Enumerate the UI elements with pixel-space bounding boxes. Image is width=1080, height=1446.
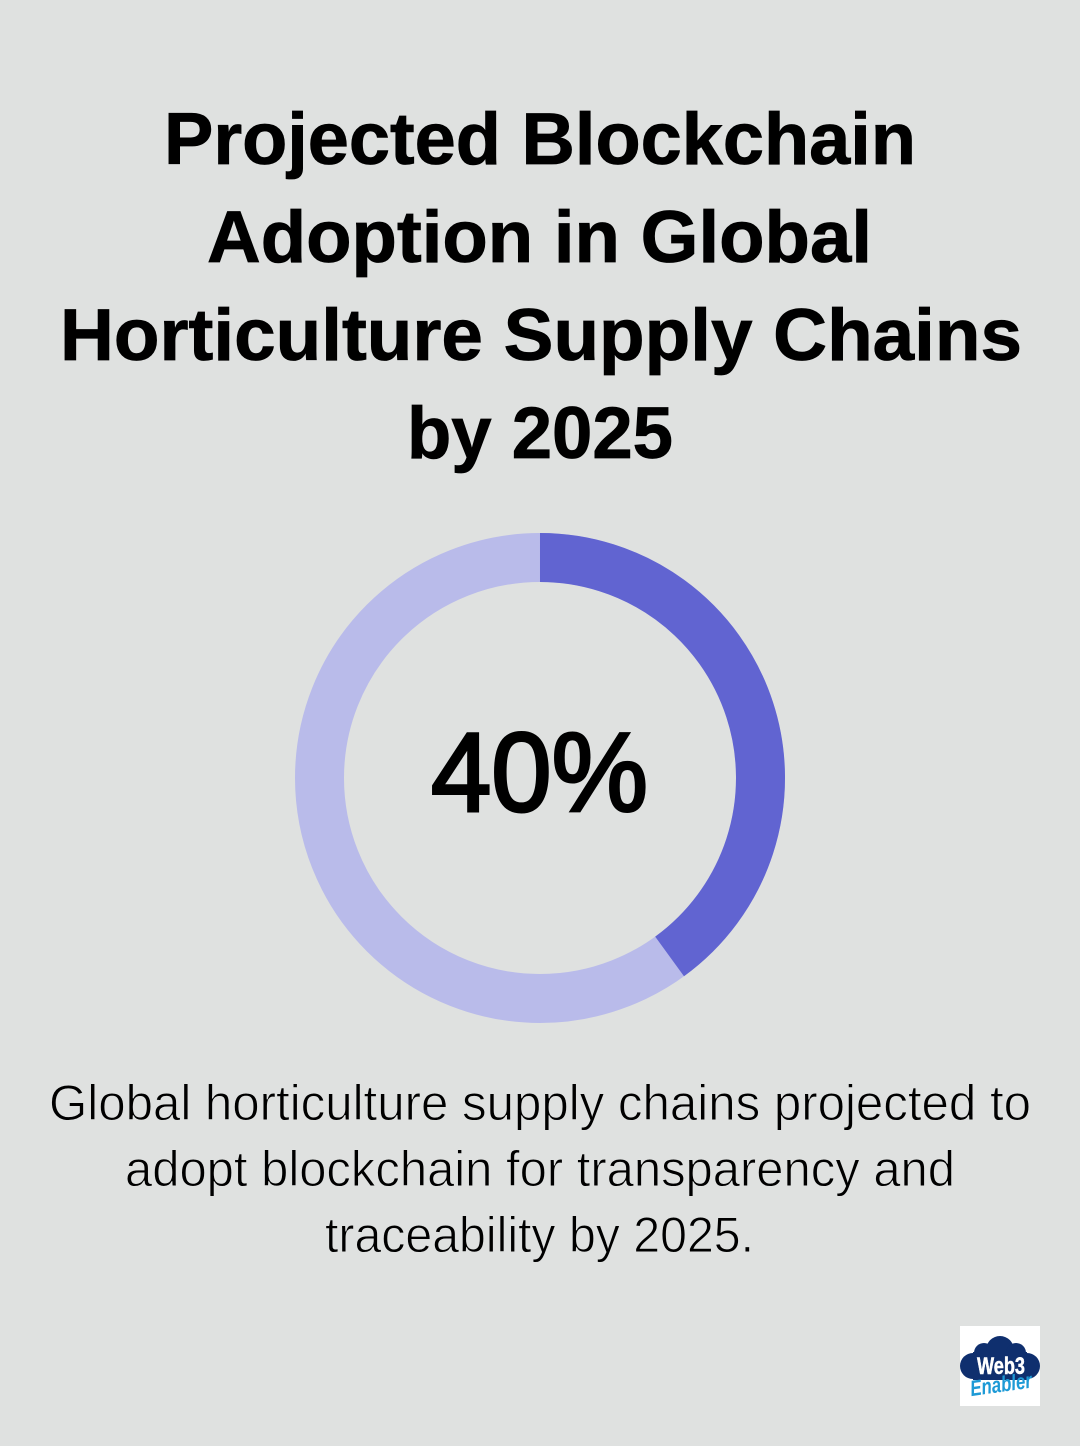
logo: Web3 Enabler <box>960 1326 1040 1406</box>
center value: 40% <box>431 710 648 835</box>
description text <box>49 1075 1031 1263</box>
donut chart: 40% <box>320 558 761 998</box>
title: Projected Blockchain <box>164 99 916 180</box>
title: Horticulture Supply Chains <box>60 295 1022 376</box>
title: by 2025 <box>407 393 673 474</box>
description text: Global horticulture supply chains projected to <box>49 1075 1031 1131</box>
title <box>60 99 1022 474</box>
title: Adoption in Global <box>207 197 872 278</box>
logo: Web3 Enabler: Web3 <box>977 1353 1025 1380</box>
description text: adopt blockchain for transparency and <box>125 1141 955 1197</box>
logo: Web3 Enabler: Enabler <box>968 1368 1034 1401</box>
description text: traceability by 2025. <box>325 1207 754 1263</box>
